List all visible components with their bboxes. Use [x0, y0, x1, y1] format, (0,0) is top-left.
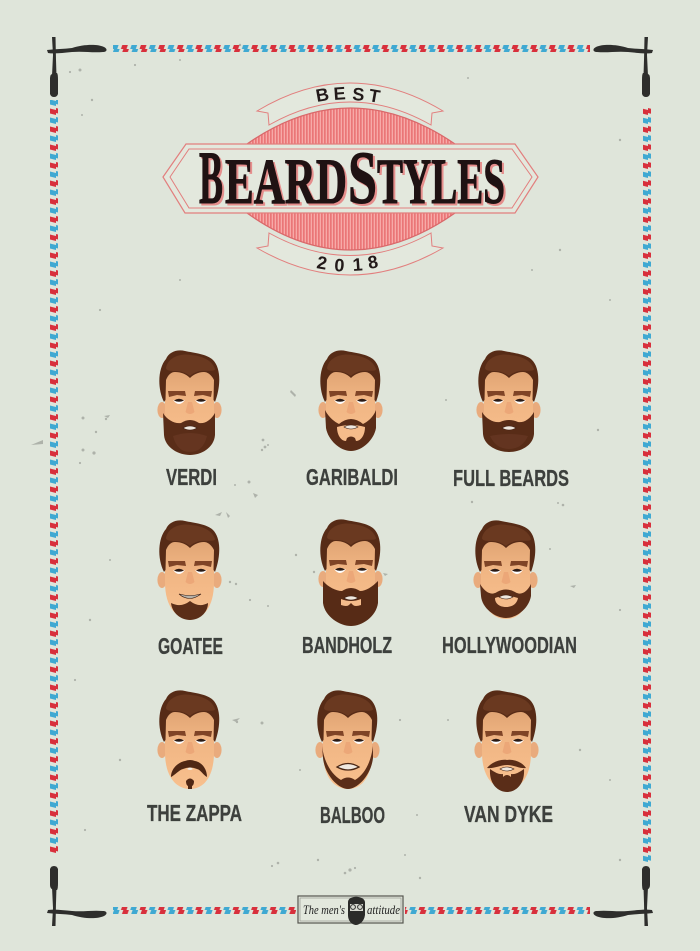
- face: Full Beards: [476, 350, 541, 452]
- badge: striped lens: [247, 108, 455, 250]
- striped border: right: [643, 108, 651, 862]
- face: Goatee: [157, 520, 222, 620]
- text: 2018: 2018: [315, 252, 380, 276]
- title shadow: B: [201, 139, 225, 222]
- label: Goatee: GOATEE: [158, 633, 223, 659]
- moustache: Van Dyke: [487, 760, 526, 768]
- label: Full Beards: FULL BEARDS: [453, 465, 569, 491]
- moustache: The Zappa: [171, 760, 207, 777]
- title badge: [163, 83, 538, 276]
- title shadow: EARD: [227, 148, 349, 220]
- beard: Van Dyke: [490, 769, 524, 792]
- beard: Goatee: [171, 601, 208, 620]
- label: Verdi: VERDI: [166, 464, 217, 490]
- beard: Balboo: [322, 746, 373, 789]
- badge: top ribbon: [257, 83, 443, 125]
- striped border: bottom left: [113, 907, 296, 914]
- face: Bandholz: [318, 519, 383, 626]
- beard: Garibaldi: [325, 410, 376, 451]
- label: Garibaldi: GARIBALDI: [306, 464, 398, 490]
- icon: razor top right: [593, 37, 653, 97]
- face: Balboo: [315, 690, 380, 789]
- badge: hexagon plate: [163, 144, 538, 213]
- label: Bandholz: BANDHOLZ: [302, 632, 392, 658]
- label: Van Dyke: VAN DYKE: [464, 801, 553, 827]
- logo text: The men's: The men's: [303, 902, 345, 917]
- face: Garibaldi: [318, 350, 383, 451]
- title: S: [348, 137, 377, 220]
- icon: razor top left: [47, 37, 107, 97]
- striped border: top: [113, 45, 590, 52]
- logo icon: bearded head: [348, 897, 365, 925]
- face: Van Dyke: [474, 690, 539, 792]
- beard: Full Beards: [482, 412, 534, 452]
- mouth: Goatee: [179, 594, 201, 598]
- soul patch: The Zappa: [186, 778, 194, 789]
- icon: razor bottom left: [47, 866, 107, 926]
- badge: bottom ribbon: [257, 233, 443, 275]
- text: BEST: BEST: [314, 83, 382, 107]
- icon: razor bottom right: [593, 866, 653, 926]
- title: EARD: [225, 146, 347, 218]
- logo text: attitude: attitude: [367, 902, 400, 917]
- striped border: left: [50, 100, 58, 855]
- beard: Bandholz: [323, 581, 378, 626]
- face: The Zappa: [157, 690, 222, 789]
- striped border: bottom right: [405, 907, 590, 914]
- label: Hollywoodian: HOLLYWOODIAN: [442, 632, 577, 658]
- paper speckles: [31, 44, 621, 879]
- face: Hollywoodian: [473, 520, 538, 619]
- label: The Zappa: THE ZAPPA: [147, 800, 242, 826]
- title shadow: TYLES: [379, 148, 507, 220]
- beard: Hollywoodian: [480, 584, 531, 618]
- title shadow: S: [350, 139, 379, 222]
- title: B: [199, 137, 223, 220]
- face: Verdi: [157, 350, 222, 455]
- title: TYLES: [377, 146, 505, 218]
- logo: The men's attitude: [298, 896, 403, 925]
- label: Balboo: BALBOO: [320, 802, 385, 828]
- beard: Verdi: [163, 413, 215, 455]
